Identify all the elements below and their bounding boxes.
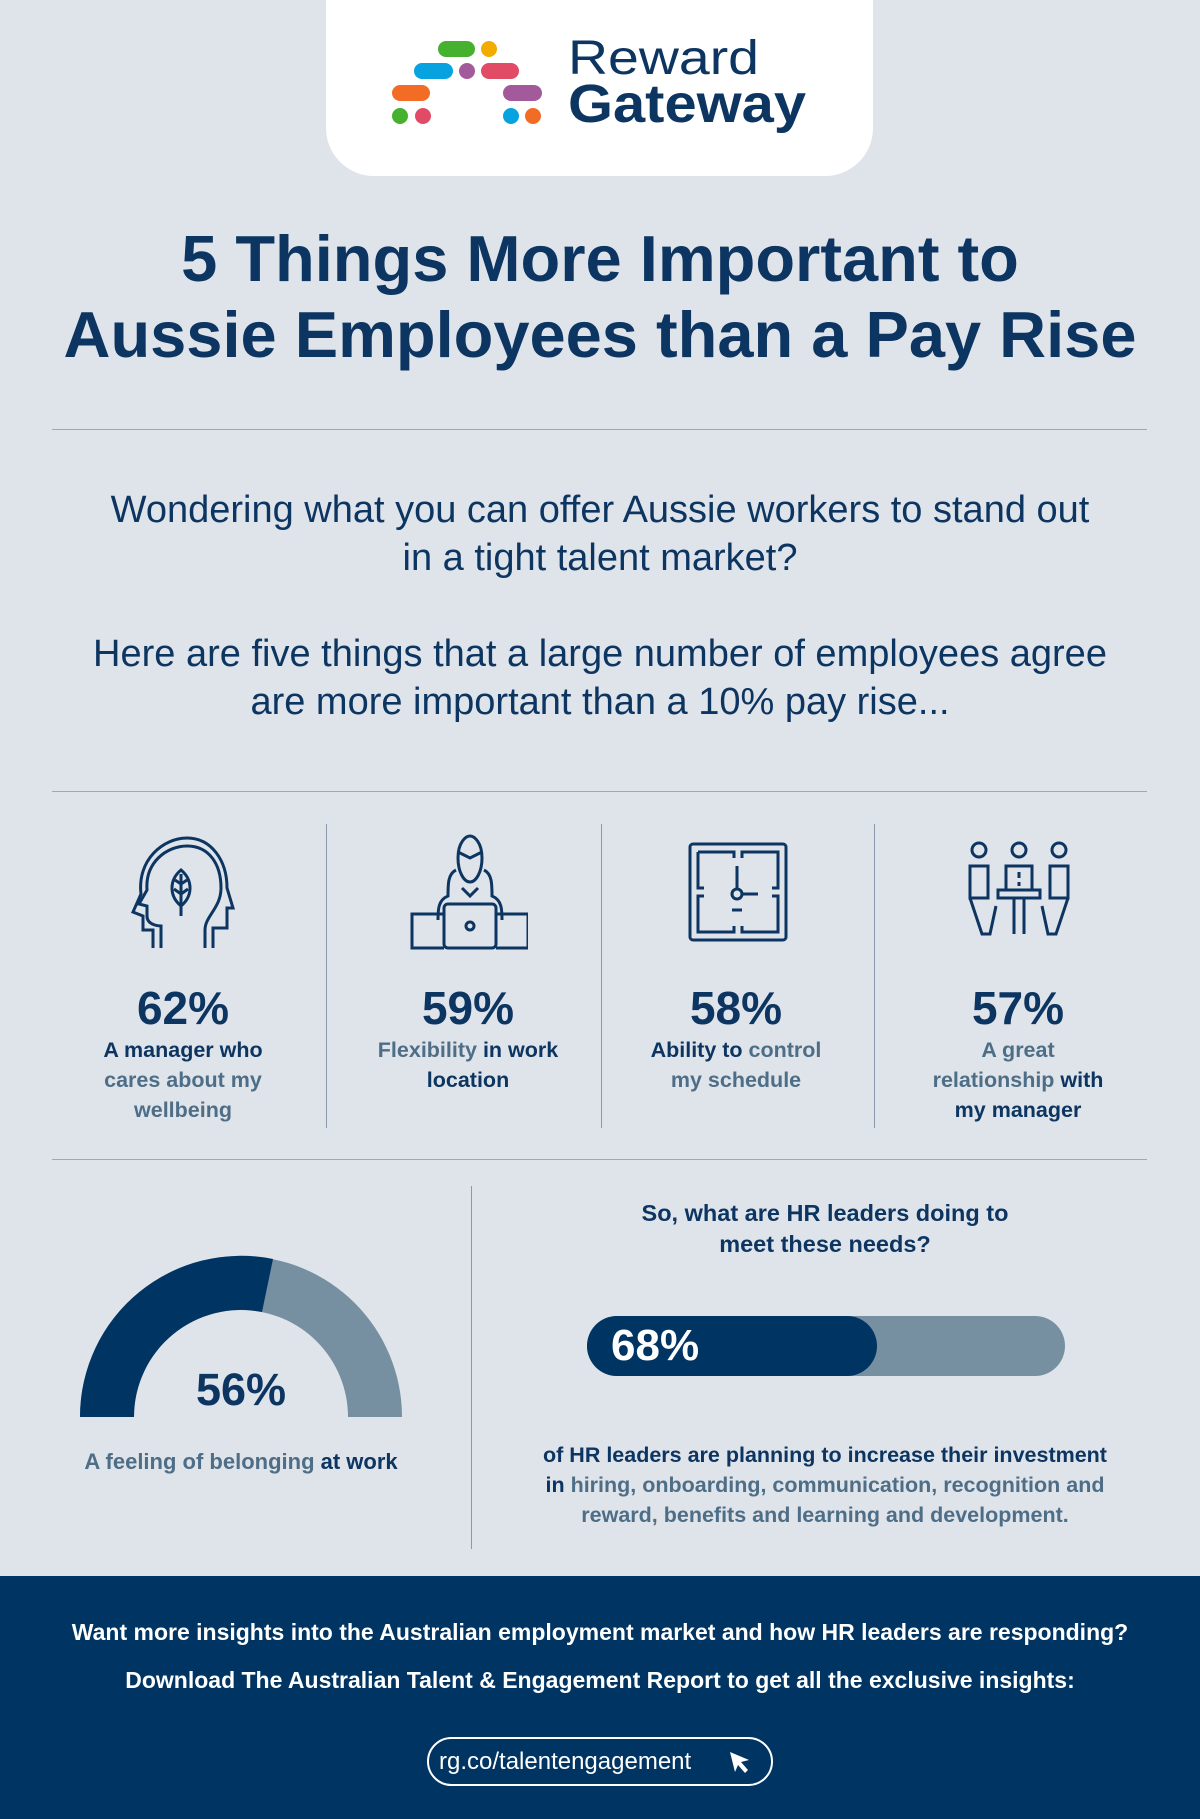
stat: 57% manager: 57% xyxy=(972,982,1064,1034)
logo mark: Reward xyxy=(568,32,759,85)
link button xyxy=(427,1737,773,1786)
stat: 59% flexibility: 59% xyxy=(422,982,514,1034)
label xyxy=(103,1038,263,1122)
icon: person at laptop xyxy=(410,834,528,950)
icon: head with leaf xyxy=(131,836,235,948)
footer text: Want more insights into the Australian employment market and how HR leaders are responding? xyxy=(72,1619,1128,1645)
title: 5 Things More Important to xyxy=(181,222,1019,295)
stat: 58% schedule xyxy=(651,842,821,1092)
intro text: Here are five things that a large number of employees agree xyxy=(93,633,1107,675)
intro text xyxy=(93,489,1107,723)
question heading: So, what are HR leaders doing to xyxy=(642,1200,1008,1226)
title xyxy=(64,222,1136,371)
stat: 57% manager: A great xyxy=(981,1038,1055,1062)
stat: 57% manager: relationship with xyxy=(933,1068,1103,1092)
stat: 57% manager xyxy=(933,842,1103,1122)
title: Aussie Employees than a Pay Rise xyxy=(64,298,1136,371)
stat: 59% flexibility: location xyxy=(427,1068,509,1092)
logo mark xyxy=(392,32,806,134)
question heading xyxy=(642,1200,1008,1257)
progress bar 68%: 68% xyxy=(611,1321,699,1370)
icon: clock xyxy=(688,842,788,942)
logo mark: Gateway xyxy=(568,74,806,134)
HR leaders text: of HR leaders are planning to increase their investment xyxy=(543,1443,1107,1467)
stat: 58% schedule: 58% xyxy=(690,982,782,1034)
intro text: are more important than a 10% pay rise... xyxy=(250,681,950,723)
stat: 62% wellbeing xyxy=(103,836,263,1122)
HR leaders text: reward, benefits and learning and development. xyxy=(581,1503,1069,1527)
label: wellbeing xyxy=(134,1098,232,1122)
gauge label: A feeling of belonging at work xyxy=(84,1449,398,1474)
percentage: 62% xyxy=(137,982,229,1034)
HR leaders text: in hiring, onboarding, communication, recognition and xyxy=(545,1473,1104,1497)
gauge value: 56% xyxy=(196,1364,286,1415)
stat: 59% flexibility xyxy=(378,834,558,1092)
logo box xyxy=(326,0,873,176)
icon: cursor xyxy=(730,1752,749,1773)
stat: 57% manager: my manager xyxy=(955,1098,1081,1122)
footer text: Download The Australian Talent & Engagement Report to get all the exclusive insights: xyxy=(125,1667,1075,1693)
gauge chart 56% xyxy=(80,1256,402,1474)
intro text: in a tight talent market? xyxy=(402,537,798,579)
label: A manager who xyxy=(103,1038,263,1062)
footer xyxy=(0,1576,1200,1819)
icon: meeting table xyxy=(968,842,1070,936)
stat: 58% schedule: Ability to control xyxy=(651,1038,821,1062)
intro text: Wondering what you can offer Aussie workers to stand out xyxy=(111,489,1089,531)
stat: 59% flexibility: Flexibility in work xyxy=(378,1038,558,1062)
footer text xyxy=(72,1619,1128,1693)
question heading: meet these needs? xyxy=(719,1231,931,1257)
stat: 58% schedule: my schedule xyxy=(671,1068,801,1092)
progress bar 68% xyxy=(587,1316,1065,1376)
label: cares about my xyxy=(104,1068,262,1092)
HR leaders text xyxy=(543,1443,1107,1527)
link button: rg.co/talentengagement xyxy=(439,1748,691,1775)
